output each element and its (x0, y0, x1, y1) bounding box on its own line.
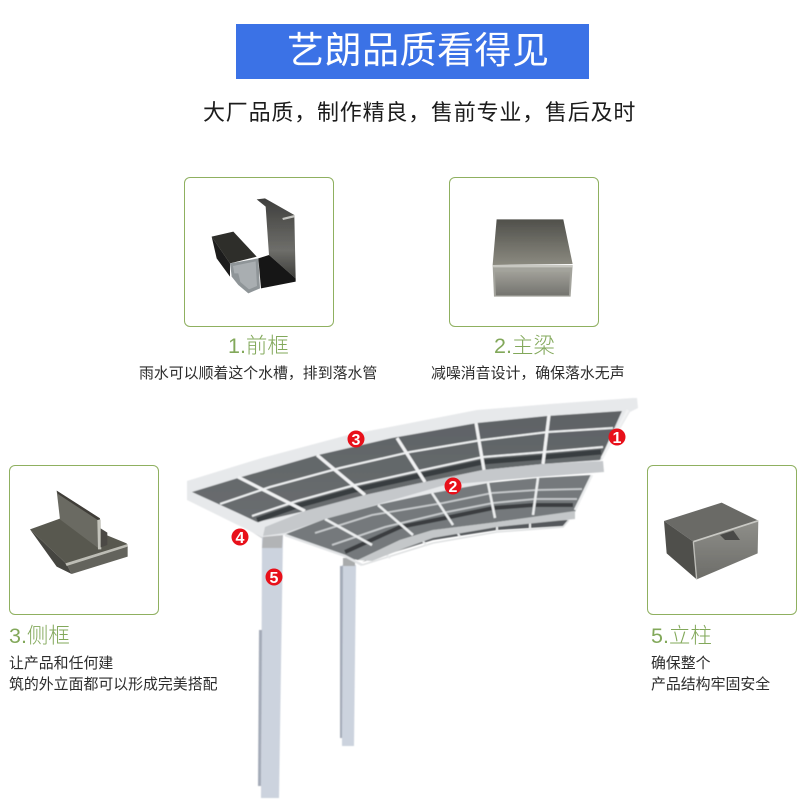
label: column: 5.立柱 (651, 624, 712, 648)
label: side frame: 3.侧框 (9, 624, 70, 648)
number badge 5 (266, 568, 282, 587)
roof purlins (220, 428, 613, 504)
roof rafters (238, 410, 628, 511)
rear beam (358, 511, 575, 561)
panel: side frame (9, 465, 159, 615)
panel: column (647, 465, 797, 615)
number badge 5: 5 (270, 570, 279, 587)
carport illustration (187, 398, 638, 798)
number badge 4 (232, 528, 248, 547)
lower roof glass (286, 475, 592, 560)
description: column: 产品结构牢固安全 (651, 677, 770, 693)
description: front frame: 雨水可以顺着这个水槽，排到落水管 (139, 366, 377, 382)
number badge 2 (444, 478, 462, 496)
subtitle: 大厂品质，制作精良，售前专业，售后及时 (203, 100, 636, 125)
bracket (240, 522, 263, 537)
icon: column profile (664, 503, 758, 579)
description: column (651, 655, 770, 693)
description: main beam: 减噪消音设计，确保落水无声 (431, 366, 625, 382)
glass shadow band (257, 452, 601, 520)
description: side frame: 筑的外立面都可以形成完美搭配 (9, 677, 217, 693)
description: side frame (9, 655, 217, 693)
number badge 1: 1 (613, 430, 622, 447)
icon: main beam profile (493, 219, 573, 297)
number badge 3: 3 (352, 432, 361, 449)
title banner (236, 24, 589, 79)
number badge 4: 4 (236, 530, 245, 547)
roof outer trim (187, 398, 638, 537)
rear column (340, 558, 356, 746)
label: front frame: 1.前框 (228, 334, 289, 358)
front column (258, 533, 283, 798)
title text: 艺朗品质看得见 (287, 30, 550, 71)
label: main beam: 2.主梁 (494, 334, 555, 358)
icon: side frame profile (30, 491, 128, 574)
description: side frame: 让产品和任何建 (9, 656, 113, 672)
number badge 3 (348, 430, 364, 449)
icon: front frame profile (212, 198, 296, 293)
lowest roof strip (285, 520, 569, 565)
description: column: 确保整个 (651, 656, 711, 672)
main beam (263, 461, 604, 536)
upper roof glass (192, 410, 628, 522)
number badge 1 (608, 428, 626, 447)
number badge 2: 2 (449, 479, 458, 496)
panel: main beam (449, 177, 599, 327)
panel: front frame (184, 177, 334, 327)
